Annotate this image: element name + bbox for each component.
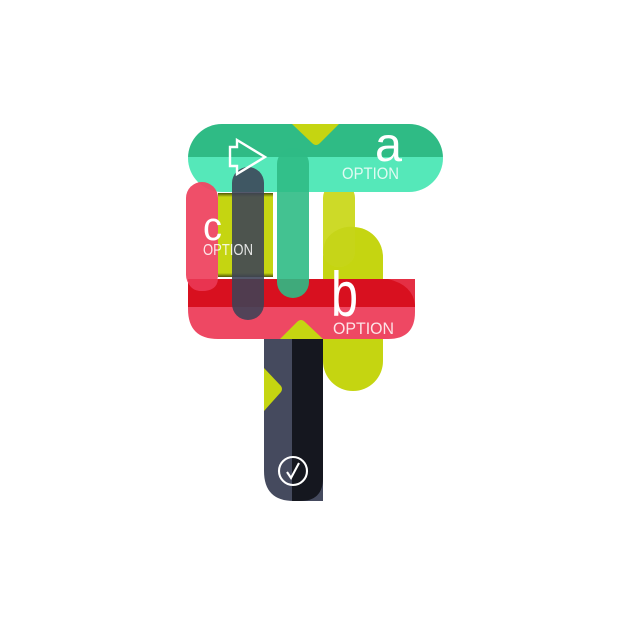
label: option c: c [203,205,222,249]
label: option b: OPTION [333,319,394,338]
label: option a [342,119,402,183]
label: option c [203,205,253,259]
panel: dark vertical pill [232,167,264,320]
icon: check mark circle [279,457,307,485]
icon: lime bottom notch [280,320,323,339]
label: option a: OPTION [342,164,399,183]
panel: option c red pill [186,182,218,291]
panel: lime small pill [323,182,355,267]
panel: lime big pill [323,227,383,391]
icon: lime top notch [292,124,339,145]
label: option b [331,260,394,338]
panel: option a bar [188,124,443,192]
label: option a: a [375,119,402,172]
infographic [186,124,443,501]
label: option b: b [331,260,358,330]
panel: green vertical pill [277,148,309,298]
panel: lime block behind [218,193,273,277]
icon: lime side notch [264,368,282,411]
label: option c: OPTION [203,242,253,259]
panel: option b bar [188,279,415,339]
icon: arrow outline [230,140,265,174]
panel: dark option bar [264,339,323,501]
